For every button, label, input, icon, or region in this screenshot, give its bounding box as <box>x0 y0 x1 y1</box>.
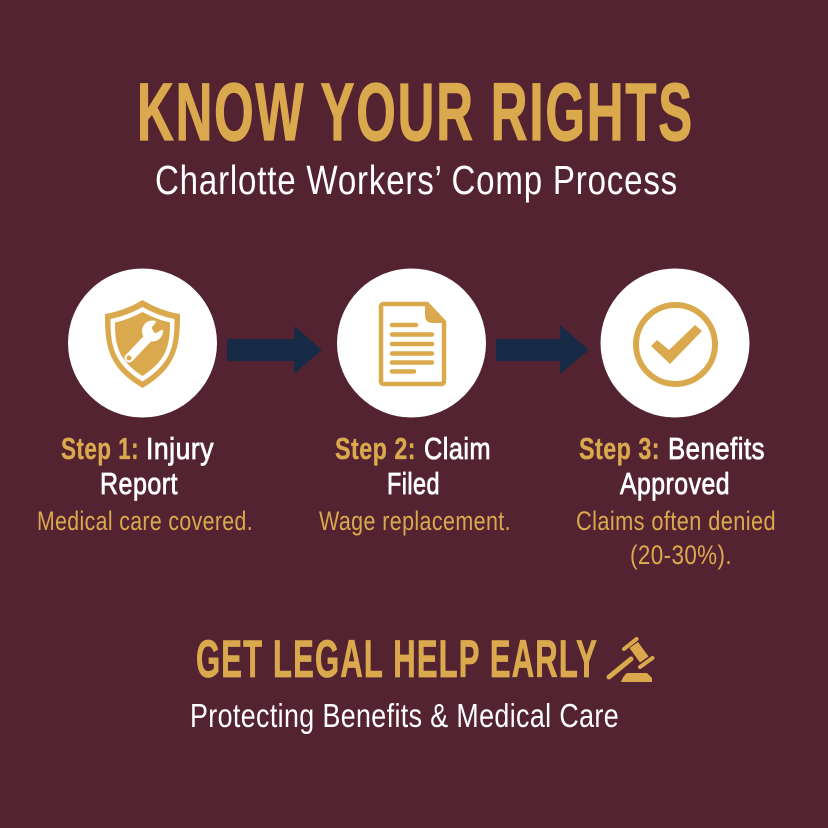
icon: document <box>381 303 445 384</box>
step 3 text: Benefits <box>668 431 765 466</box>
icon: shield with wrench <box>105 300 180 388</box>
step 2 text: Filed <box>387 466 440 501</box>
step 1 circle with shield icon <box>68 268 217 418</box>
icon: gavel <box>609 639 652 682</box>
step 1 text: Step 1: <box>61 431 139 466</box>
step 2 text: Step 2: <box>335 431 416 466</box>
step 1 text: Medical care covered. <box>37 506 253 536</box>
icon: check mark <box>636 305 715 384</box>
step 3 text <box>576 431 776 570</box>
arrow 2 <box>496 325 589 374</box>
step 2 text: Wage replacement. <box>319 506 511 536</box>
tagline: Protecting Benefits & Medical Care <box>190 697 619 734</box>
step 1 text <box>37 431 253 536</box>
step 1 text: Injury <box>146 431 214 466</box>
step 2 circle with document icon <box>337 268 486 418</box>
step 1 text: Report <box>100 466 178 501</box>
step 3 circle with check icon <box>600 268 750 418</box>
step 3 text: (20-30%). <box>630 540 732 570</box>
subtitle: Charlotte Workers’ Comp Process <box>155 157 678 203</box>
step 2 text: Claim <box>424 431 491 466</box>
step 2 text <box>319 431 511 536</box>
step 3 text: Step 3: <box>579 431 660 466</box>
step 3 text: Claims often denied <box>576 506 776 536</box>
arrow 1 <box>227 326 322 374</box>
step 3 text: Approved <box>620 466 730 501</box>
